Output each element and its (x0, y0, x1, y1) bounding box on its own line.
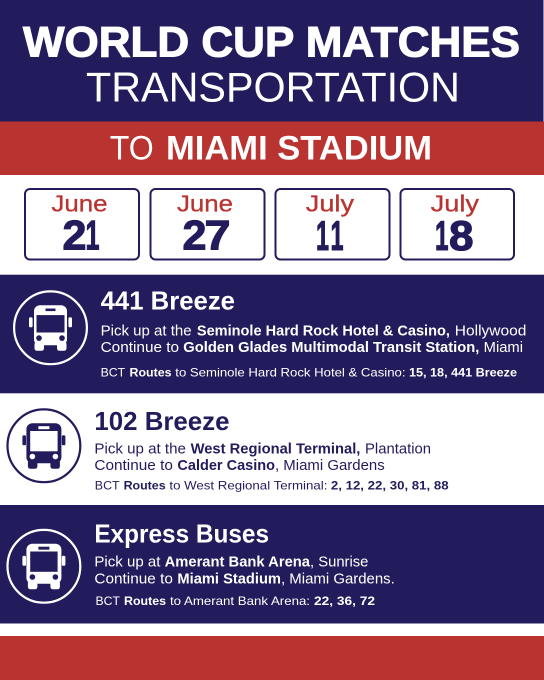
continue line: Golden Glades Multimodal Transit Station, (183, 340, 479, 356)
pick up line: , Sunrise (310, 555, 368, 571)
continue line: Miami (484, 340, 523, 356)
routes line: BCT (101, 366, 126, 380)
heading: 441 Breeze (101, 287, 235, 315)
panel: 102 Breeze (8, 408, 449, 492)
panel: header (0, 0, 544, 122)
date card: June 21: June (51, 190, 108, 216)
continue line: Continue to (101, 340, 179, 356)
routes line (95, 478, 449, 492)
routes line: Routes (124, 594, 166, 608)
pick up line (94, 555, 368, 571)
routes line: to Seminole Hard Rock Hotel & Casino: (175, 366, 406, 380)
routes line (101, 366, 517, 380)
pick up line (101, 323, 526, 339)
date card: July 18: 1 (435, 212, 448, 259)
routes line (96, 594, 375, 608)
heading: Express Buses (94, 521, 269, 549)
heading: 102 Breeze (94, 408, 230, 436)
title line 1: WORLD CUP MATCHES (23, 19, 520, 67)
pick up line: Amerant Bank Arena (165, 555, 311, 571)
continue line: Continue to (94, 571, 173, 587)
pick up line: Hollywood (455, 323, 526, 339)
date card: July 18: 8 (449, 212, 474, 259)
date card: July 11: 1 (330, 212, 344, 259)
routes line: BCT (96, 594, 121, 608)
continue line (94, 458, 385, 474)
pick up line: West Regional Terminal, (191, 441, 360, 457)
date card: June 21: 2 (62, 212, 86, 258)
routes line: to Amerant Bank Arena: (170, 594, 310, 608)
icon: bus in circle (14, 291, 87, 364)
continue line: Calder Casino (177, 458, 275, 474)
footer band (0, 636, 544, 680)
routes line: 2, 12, 22, 30, 81, 88 (331, 478, 449, 492)
date card: June 27 (150, 189, 264, 260)
date card: June 21 (25, 189, 139, 260)
routes line: 22, 36, 72 (314, 594, 375, 608)
continue line (101, 340, 523, 356)
continue line: , Miami Gardens (275, 458, 385, 474)
routes line: BCT (95, 478, 120, 492)
continue line: Miami Stadium (177, 571, 281, 587)
pick up line: Pick up at (94, 555, 160, 571)
icon: bus in circle (8, 530, 80, 603)
pick up line: Pick up at the (101, 323, 192, 339)
panel: destination banner: MIAMI STADIUM (166, 129, 432, 167)
panel: Express Buses (0, 505, 544, 624)
panel: destination banner: TO (110, 129, 154, 167)
pick up line: Pick up at the (94, 441, 186, 457)
date card: July 18: July (431, 190, 480, 216)
routes line: Routes (124, 478, 166, 492)
date card: July 18 (400, 189, 514, 260)
panel: destination banner (0, 122, 544, 175)
continue line: Continue to (94, 458, 173, 474)
routes line: 15, 18, 441 Breeze (409, 366, 517, 380)
panel: 441 Breeze (0, 275, 544, 393)
date card: July 11 (276, 189, 390, 260)
date card: July 11: July (306, 190, 355, 216)
title line 2: TRANSPORTATION (86, 63, 460, 110)
date card: June 27: June (177, 190, 233, 216)
date card: June 27: 7 (204, 212, 230, 258)
date card: June 27: 2 (182, 212, 206, 258)
continue line: , Miami Gardens. (281, 571, 395, 587)
routes line: to West Regional Terminal: (169, 478, 327, 492)
date card: June 21: 1 (86, 212, 100, 258)
pick up line: Plantation (365, 441, 431, 457)
routes line: Routes (130, 366, 172, 380)
continue line (94, 571, 395, 587)
icon: bus in circle (8, 409, 80, 482)
date card: July 11: 1 (316, 212, 329, 259)
pick up line (94, 441, 431, 457)
pick up line: Seminole Hard Rock Hotel & Casino, (197, 323, 450, 339)
